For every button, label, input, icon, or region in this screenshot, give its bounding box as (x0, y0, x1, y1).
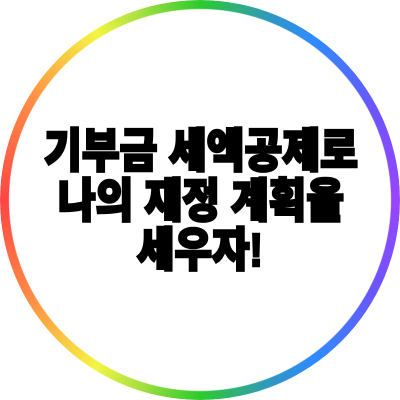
title line 2: 나의 재정 계획을 (58, 176, 344, 228)
title line 1: 기부금 세액공제로 (44, 126, 358, 178)
title line 3: 세우자! (137, 225, 263, 277)
